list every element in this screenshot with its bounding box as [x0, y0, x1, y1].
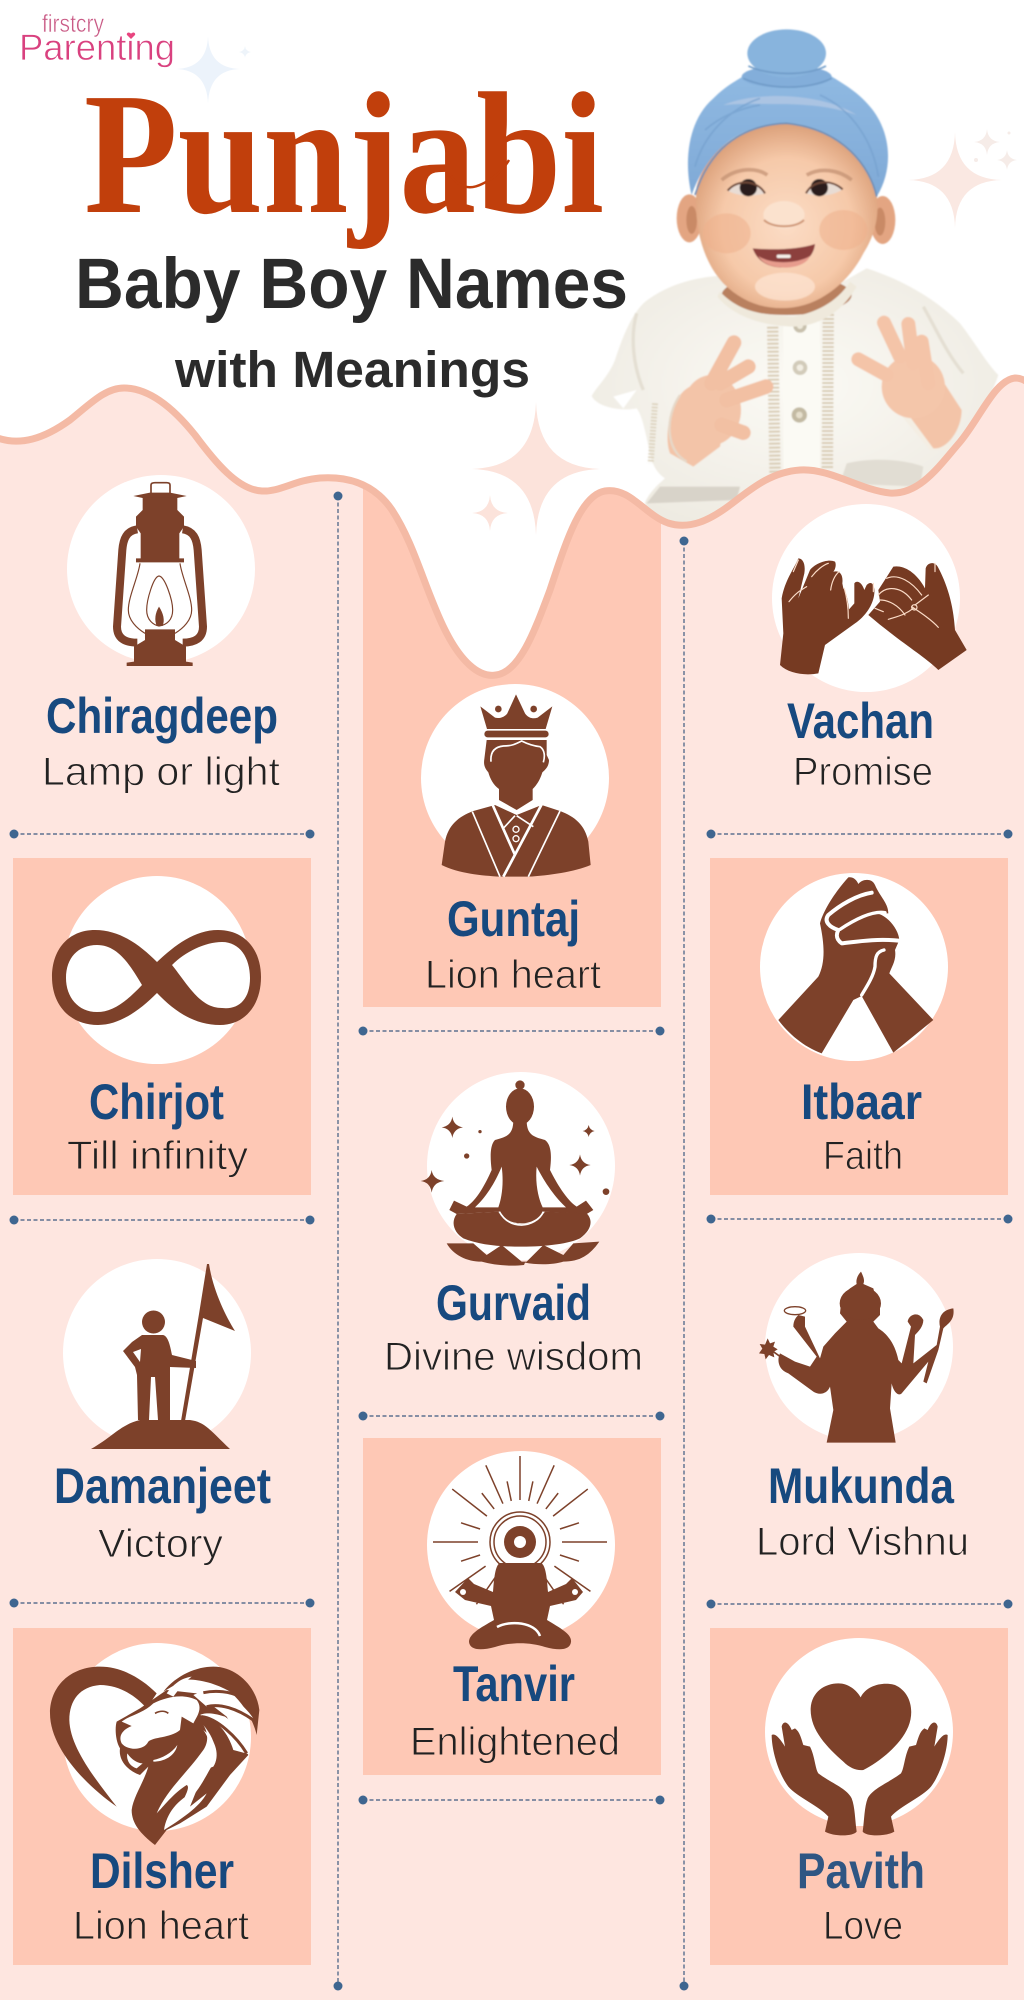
chin highlight	[755, 273, 815, 301]
icon: infinity	[52, 930, 261, 1025]
name: Itbaar	[801, 1074, 922, 1130]
eyes	[728, 182, 765, 196]
meaning: Love	[823, 1904, 903, 1948]
placket	[783, 320, 820, 470]
brows	[722, 170, 767, 180]
icon: hands holding a heart	[772, 1683, 948, 1835]
left hand	[667, 387, 727, 467]
panel: Tanvir	[363, 1438, 661, 1775]
buttons	[793, 319, 807, 333]
wave edge line	[0, 378, 1024, 675]
name: Pavith	[797, 1843, 925, 1899]
icon: Lord Vishnu silhouette	[759, 1272, 954, 1443]
name: Tanvir	[453, 1656, 575, 1712]
icon: clasped praying hands	[778, 877, 933, 1053]
panel: Guntaj background	[363, 489, 661, 1007]
name: Dilsher	[90, 1843, 234, 1899]
name: Mukunda	[768, 1458, 955, 1514]
name: Guntaj	[447, 891, 580, 947]
logo: FirstCry Parenting: firstcry	[42, 10, 104, 38]
icon: enlightened meditating figure with rays	[433, 1456, 607, 1649]
panel: Itbaar	[710, 858, 1008, 1195]
meaning: Lord Vishnu	[756, 1520, 969, 1564]
icon: lantern	[117, 483, 203, 666]
meaning: Victory	[98, 1522, 223, 1566]
panel: Guntaj	[421, 684, 609, 997]
sleeve folds	[613, 390, 637, 408]
name: Chirjot	[89, 1074, 224, 1130]
ears	[677, 194, 702, 242]
sparkles	[176, 36, 1017, 535]
nose	[763, 201, 805, 229]
panel: Pavith	[710, 1628, 1008, 1965]
right hand	[897, 410, 953, 450]
icon: meditating figure	[421, 1080, 609, 1266]
meaning: Lion heart	[425, 953, 601, 997]
logo: FirstCry Parenting	[19, 10, 175, 68]
meaning: Till infinity	[67, 1134, 248, 1178]
meaning: Promise	[793, 750, 933, 794]
subtitle: Baby Boy Names: Baby Boy Names	[75, 245, 628, 324]
neck shadow	[722, 275, 852, 315]
meaning: Divine wisdom	[384, 1335, 643, 1379]
panel: Chiragdeep	[42, 475, 280, 794]
name: Gurvaid	[436, 1275, 591, 1331]
meaning: Lion heart	[73, 1904, 249, 1948]
title: Punjabi: Punjabi	[84, 57, 604, 250]
kurta	[592, 268, 998, 527]
panel: Chirjot	[13, 858, 311, 1195]
icon: pinky promise hands	[780, 558, 967, 674]
icon: man with flag on a hill	[91, 1264, 235, 1449]
meaning: Faith	[823, 1134, 903, 1178]
panel: Mukunda	[756, 1253, 969, 1564]
meaning: Enlightened	[410, 1720, 620, 1764]
name: Vachan	[787, 693, 934, 749]
panel: Dilsher	[13, 1628, 311, 1965]
mouth	[753, 244, 815, 267]
name: Chiragdeep	[46, 688, 278, 744]
turban	[688, 73, 888, 197]
panel: Gurvaid	[384, 1072, 643, 1379]
cheeks	[703, 213, 751, 253]
meaning: Lamp or light	[42, 750, 280, 794]
panel: Damanjeet	[54, 1259, 271, 1566]
subtitle: with Meanings: with Meanings	[174, 341, 530, 398]
photo: smiling baby in blue turban	[592, 29, 998, 527]
icon: crowned man	[442, 694, 591, 877]
icon: lion heart	[50, 1667, 259, 1845]
collar	[717, 282, 857, 327]
dividers and column rules	[10, 492, 1012, 1990]
logo: FirstCry Parenting: Parenting	[19, 27, 175, 68]
name: Damanjeet	[54, 1458, 271, 1514]
panel: Vachan	[772, 504, 967, 794]
head	[696, 123, 878, 308]
